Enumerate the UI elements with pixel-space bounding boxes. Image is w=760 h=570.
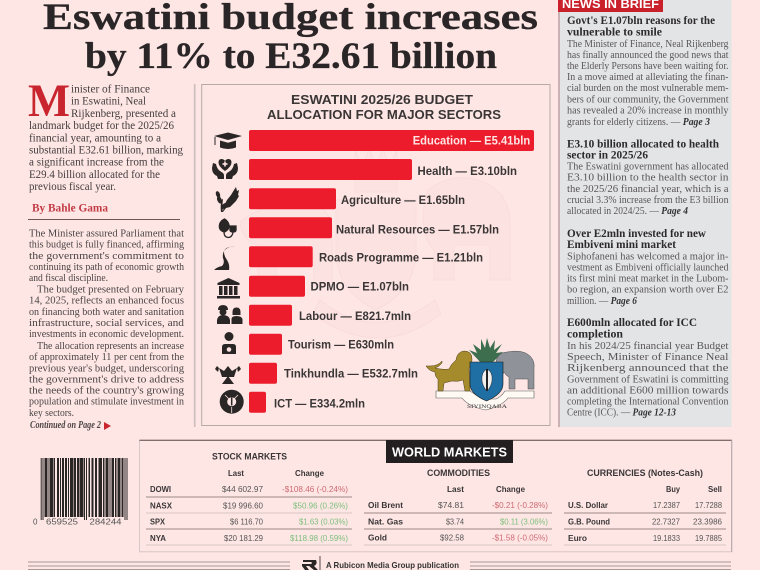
news item 3: Siphofaneni has welcomed a major in- bbox=[567, 250, 729, 262]
lead article intro: inister of Finance bbox=[71, 82, 150, 96]
icon: tinkhundla bbox=[215, 366, 241, 384]
table: stock markets bbox=[146, 452, 352, 545]
table: stock markets: $20 181.29 bbox=[224, 534, 263, 543]
bar: Natural Resources bbox=[249, 217, 499, 238]
news item 1: Govt's E1.07bln reasons for the bbox=[567, 15, 715, 27]
table: currencies: Euro bbox=[568, 533, 587, 543]
bar: Tourism bbox=[249, 334, 394, 355]
lead article intro: previous fiscal year. bbox=[29, 179, 116, 193]
icon: tourist with camera bbox=[222, 332, 236, 354]
table: stock markets: STOCK MARKETS bbox=[212, 452, 287, 462]
article body text: of approximately 11 per cent from the bbox=[29, 351, 184, 363]
coat of arms bbox=[426, 338, 534, 410]
panel: budget allocation chart bbox=[202, 84, 550, 426]
news item 1: the Elderly Persons have been waiting for. bbox=[567, 60, 728, 72]
article body text: 14, 2025, reflects an enhanced focus bbox=[29, 294, 184, 306]
world markets header: WORLD MARKETS bbox=[392, 444, 507, 460]
news item 3: Embiveni mini market bbox=[567, 239, 676, 251]
table: commodities: Nat. Gas bbox=[368, 517, 403, 527]
news item 2: E3.10 billion allocated to health bbox=[567, 138, 720, 150]
table: stock markets: $50.96 (0.26%) bbox=[293, 502, 348, 511]
icon: bank building bbox=[217, 278, 240, 298]
bar: Roads Programme bbox=[249, 246, 483, 267]
article body text: continuing its path of economic growth bbox=[29, 261, 185, 273]
table: commodities: Gold bbox=[368, 533, 387, 543]
table: currencies: Buy bbox=[666, 484, 680, 494]
article body text: key sectors. bbox=[29, 407, 74, 419]
world markets header bbox=[386, 440, 513, 463]
lead article intro bbox=[28, 75, 183, 193]
table: currencies: 22.7327 bbox=[652, 518, 680, 527]
bar: Health bbox=[249, 159, 517, 180]
article body text: on financing both water and sanitation bbox=[29, 306, 185, 318]
bar: ICT bbox=[249, 392, 365, 413]
lead article intro: Rijkenberg, presented a bbox=[71, 106, 177, 120]
news item 2: E3.10 billion to the health sector in bbox=[567, 172, 729, 184]
panel: news in brief bbox=[558, 0, 732, 427]
news item 4: Speech, Minister of Finance Neal bbox=[567, 351, 728, 363]
bar: Roads Programme: Roads Programme — E1.21bln bbox=[319, 250, 483, 264]
ribbon bbox=[436, 391, 534, 410]
barcode: 659525 bbox=[46, 518, 79, 526]
article body text: this budget is fully financed, affirming bbox=[29, 239, 185, 251]
table: currencies: U.S. Dollar bbox=[568, 500, 609, 510]
table: stock markets: $118.98 (0.59%) bbox=[290, 534, 348, 543]
table: stock markets: DOWI bbox=[150, 484, 171, 494]
table: stock markets: Last bbox=[228, 468, 244, 478]
table: stock markets: NYA bbox=[150, 533, 166, 543]
news item 2: allocated in 2024/25. — Page 4 bbox=[567, 205, 689, 217]
news item 4: Government of Eswatini is committing bbox=[567, 374, 729, 386]
byline: By Bahle Gama bbox=[32, 202, 108, 214]
table: currencies: 19.1833 bbox=[653, 534, 680, 543]
news item 1: The Minister of Finance, Neal Rijkenberg bbox=[567, 38, 729, 50]
icon: wheat bbox=[215, 187, 239, 212]
table: currencies: 17.7288 bbox=[695, 501, 722, 510]
table: currencies: G.B. Pound bbox=[568, 517, 610, 527]
table: commodities: $74.81 bbox=[438, 501, 464, 510]
table: commodities: $0.11 (3.06%) bbox=[500, 518, 548, 527]
table: stock markets: -$108.46 (-0.24%) bbox=[282, 485, 348, 494]
article body text: previous year's budget, underscoring bbox=[29, 362, 185, 374]
news item 1: has revealed a 20% increase in monthly bbox=[567, 104, 729, 116]
news item 4: completion bbox=[567, 328, 624, 340]
article body text: and fiscal discipline. bbox=[29, 272, 108, 284]
table: currencies bbox=[564, 468, 726, 545]
icon: graduation cap bbox=[214, 132, 242, 149]
lead article intro: a significant increase from the bbox=[29, 155, 164, 169]
news item 3: vestment as Embiveni officially launched bbox=[567, 262, 729, 274]
barcode: 0 bbox=[33, 518, 38, 526]
news item 1: cial burden on the most vulnerable mem- bbox=[567, 82, 729, 94]
chart title: ALLOCATION FOR MAJOR SECTORS bbox=[267, 107, 501, 122]
table: currencies: Sell bbox=[708, 484, 722, 494]
bar: DPMO bbox=[249, 276, 409, 297]
article body text: The allocation represents an increase bbox=[37, 340, 184, 352]
news item 3: million. — Page 6 bbox=[567, 295, 638, 307]
news item 2: sector in 2025/26 bbox=[567, 150, 648, 162]
news item 4 bbox=[567, 317, 729, 418]
article body text: infrastructure, social services, and bbox=[29, 317, 185, 329]
news item 2: The Eswatini government has allocated bbox=[567, 161, 729, 173]
bar: Tourism: Tourism — E630mln bbox=[288, 338, 394, 352]
table: commodities: Oil Brent bbox=[368, 500, 403, 510]
shield bbox=[470, 362, 503, 401]
bar: Labour: Labour — E821.7mln bbox=[299, 309, 411, 323]
table: stock markets: NASX bbox=[150, 501, 172, 511]
news item 1: has finally announced the good news that bbox=[567, 49, 728, 61]
pineapple crown bbox=[469, 338, 503, 364]
title: by 11% to E32.61 billion bbox=[85, 36, 497, 77]
table: currencies: 23.3986 bbox=[693, 518, 722, 527]
article body text: population and stimulate investment in bbox=[29, 396, 185, 408]
news item 3: bo region, an expansion worth over E2 bbox=[567, 284, 728, 296]
news item 3: Over E2mln invested for new bbox=[567, 228, 707, 240]
news item 4: Centre (ICC). — Page 12-13 bbox=[567, 406, 677, 418]
bar: Education bbox=[249, 130, 534, 151]
table: commodities: COMMODITIES bbox=[427, 468, 490, 479]
news item 4: Rijkenberg announced that the bbox=[567, 362, 729, 374]
news item 2 bbox=[567, 138, 729, 217]
table: currencies: 17.2387 bbox=[653, 501, 680, 510]
elephant bbox=[496, 351, 534, 389]
news item 4: an additional E600 million towards bbox=[567, 384, 728, 396]
drop cap: M bbox=[28, 75, 70, 127]
bar: Agriculture: Agriculture — E1.65bln bbox=[341, 193, 465, 207]
table: stock markets: $19 996.60 bbox=[223, 502, 263, 511]
article body text: investments in economic development. bbox=[29, 328, 184, 340]
publisher logo bbox=[302, 560, 318, 570]
lead article intro: substantial E32.61 billion, marking bbox=[29, 142, 183, 156]
bar: Natural Resources: Natural Resources — E1.57bln bbox=[336, 222, 499, 236]
panel: world markets bbox=[140, 440, 732, 552]
table: commodities: $92.58 bbox=[440, 534, 464, 543]
motto: SIYINQABA bbox=[467, 404, 507, 410]
news item 3 bbox=[567, 228, 729, 307]
table: commodities: Change bbox=[496, 484, 525, 494]
article body text: the government's commitment to bbox=[29, 250, 184, 262]
news item 1 bbox=[567, 15, 729, 128]
footer publisher line bbox=[28, 556, 731, 570]
title bbox=[43, 0, 538, 77]
bar: Education: Education — E5.41bln bbox=[413, 133, 530, 147]
bar: Tinkhundla bbox=[249, 363, 418, 384]
table: commodities: -$0.21 (-0.28%) bbox=[492, 501, 548, 510]
bar: Health: Health — E3.10bln bbox=[418, 164, 517, 178]
barcode bbox=[33, 458, 128, 526]
table: stock markets: $44 602.97 bbox=[222, 485, 263, 494]
table: commodities: $3.74 bbox=[446, 518, 464, 527]
icon: heart in hands bbox=[212, 159, 238, 179]
icon: ICT wheel bbox=[220, 390, 244, 414]
icon: leaf and plug bbox=[219, 219, 236, 238]
table: commodities bbox=[364, 468, 552, 545]
news item 1: bers of our community, the Government bbox=[567, 93, 728, 105]
article body text: The budget presented on February bbox=[37, 284, 185, 296]
table: stock markets: SPX bbox=[150, 517, 165, 527]
lead article intro: financial year, amounting to a bbox=[29, 130, 162, 144]
news item 3: its first mini meat market in the Lubom- bbox=[567, 272, 729, 284]
article body text: The Minister assured Parliament that bbox=[29, 228, 184, 240]
icon: workers bbox=[217, 305, 242, 324]
table: commodities: -$1.58 (-0.05%) bbox=[492, 534, 548, 543]
table: currencies: CURRENCIES (Notes-Cash) bbox=[587, 468, 703, 479]
bar: Tinkhundla: Tinkhundla — E532.7mln bbox=[284, 366, 418, 380]
table: stock markets: $1.63 (0.03%) bbox=[299, 518, 348, 527]
chart title bbox=[267, 92, 501, 122]
bar: ICT: ICT — E334.2mln bbox=[274, 396, 365, 410]
news item 4: completing the International Convention bbox=[567, 396, 729, 408]
article body text: the government's drive to address bbox=[29, 374, 184, 386]
article body text bbox=[29, 228, 185, 419]
lead article intro: E29.4 billion allocated for the bbox=[29, 167, 160, 181]
news item 4: E600mln allocated for ICC bbox=[567, 317, 697, 329]
bar: Labour bbox=[249, 305, 411, 326]
icon: winding road bbox=[214, 247, 235, 270]
bar: DPMO: DPMO — E1.07bln bbox=[310, 280, 409, 294]
continued on page 2: Continued on Page 2 bbox=[30, 420, 101, 431]
bar: Agriculture bbox=[249, 188, 465, 209]
news item 2: crucial 3.3% increase from the E3 billion bbox=[567, 194, 729, 206]
watermark: faint coat of arms bbox=[240, 148, 510, 338]
news item 1: In a move aimed at alleviating the finan- bbox=[567, 71, 729, 83]
footer publisher line: A Rubicon Media Group publication bbox=[326, 560, 459, 570]
article body text: the needs of the country's growing bbox=[29, 385, 185, 397]
lead article intro: in Eswatini, Neal bbox=[71, 94, 147, 108]
lead article intro: landmark budget for the 2025/26 bbox=[29, 118, 174, 132]
table: commodities: Last bbox=[447, 484, 464, 494]
chart title: ESWATINI 2025/26 BUDGET bbox=[291, 92, 473, 107]
lion bbox=[426, 351, 472, 391]
news item 1: vulnerable to smile bbox=[567, 26, 662, 38]
table: stock markets: Change bbox=[295, 468, 324, 478]
table: stock markets: $6 116.70 bbox=[230, 518, 263, 527]
news item 4: In his 2024/25 financial year Budget bbox=[567, 340, 728, 352]
news item 1: grants for elderly citizens. — Page 3 bbox=[567, 116, 711, 128]
news item 2: the 2025/26 financial year, which is a bbox=[567, 183, 729, 195]
table: currencies: 19.7885 bbox=[695, 534, 722, 543]
barcode: 284244 bbox=[90, 518, 122, 526]
